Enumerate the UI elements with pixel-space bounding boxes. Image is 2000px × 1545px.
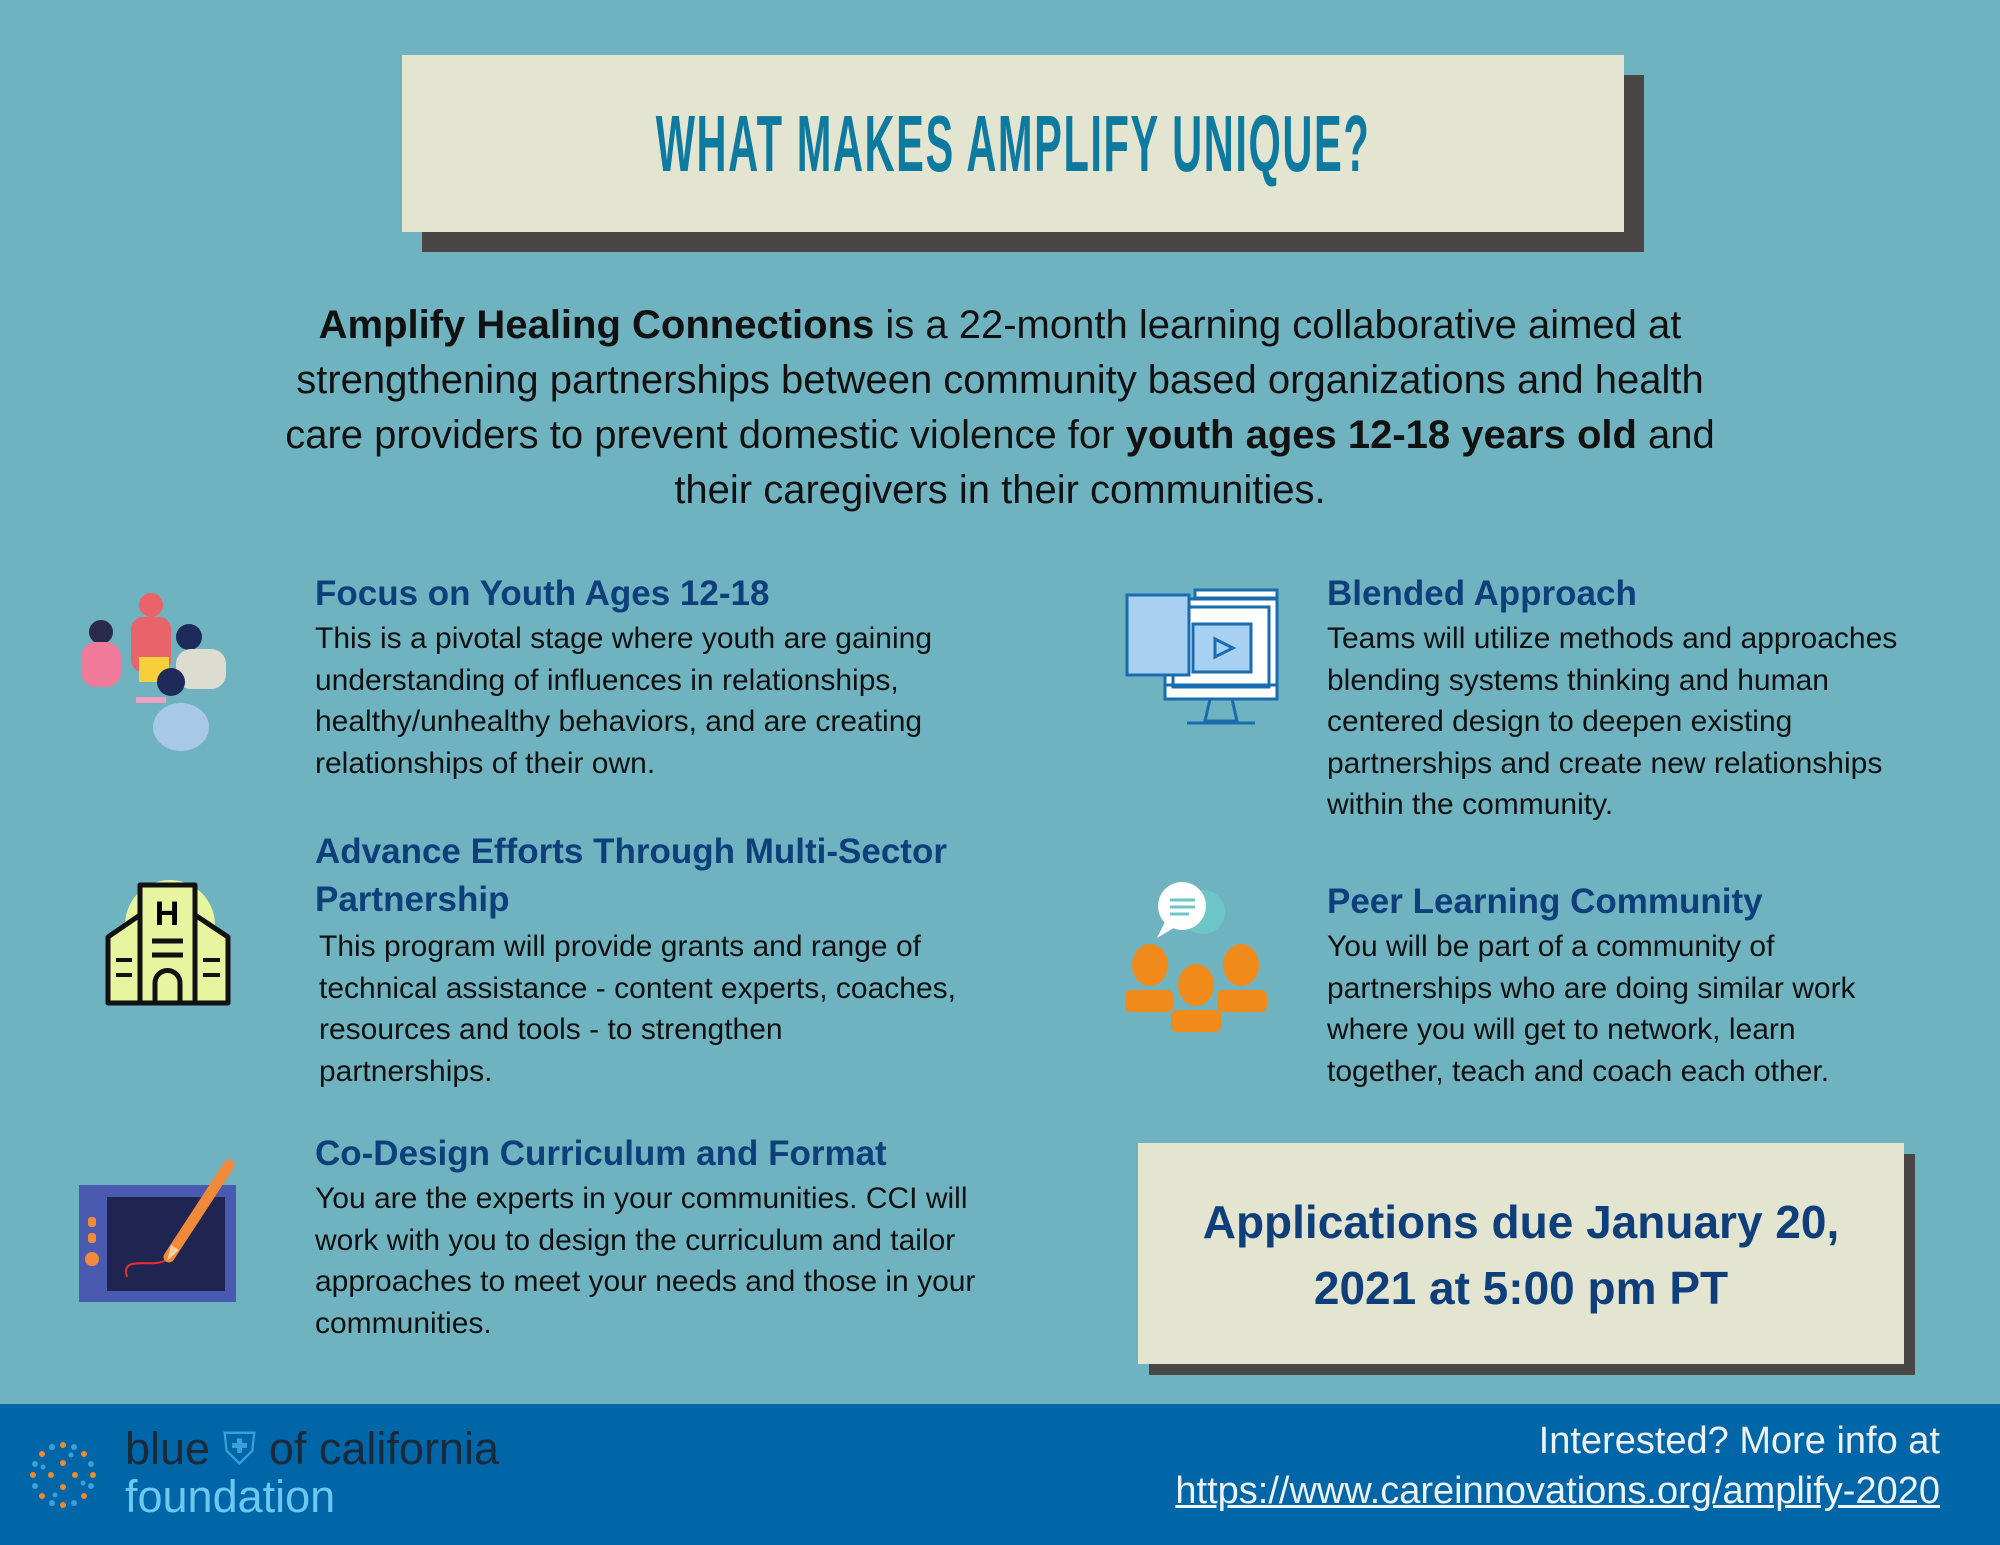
- section: focus on youth: understanding of influences in relationships,: [315, 664, 899, 697]
- section: peer learning: [1327, 882, 1856, 1088]
- section: focus on youth: This is a pivotal stage where youth are gaining: [315, 622, 932, 655]
- section: multi-sector: This program will provide grants and range of: [319, 930, 921, 963]
- section: blended approach: Teams will utilize methods and approaches: [1327, 622, 1897, 655]
- section: co-design: approaches to meet your needs and those in your: [315, 1265, 975, 1298]
- title: WHAT MAKES AMPLIFY UNIQUE?: [656, 99, 1370, 188]
- section: blended approach: within the community.: [1327, 788, 1613, 821]
- footer: [0, 1404, 2000, 1545]
- section: peer learning: together, teach and coach each other.: [1327, 1055, 1829, 1088]
- callout: applications due: Applications due January 20,: [1203, 1196, 1839, 1248]
- callout: applications due: 2021 at 5:00 pm PT: [1314, 1262, 1728, 1314]
- icon: tablet: [79, 1160, 236, 1302]
- footer link text: Interested? More info at: [1539, 1420, 1940, 1462]
- footer link text: https://www.careinnovations.org/amplify-2020: [1175, 1470, 1940, 1512]
- section: multi-sector: resources and tools - to strengthen: [319, 1013, 783, 1046]
- intro paragraph: Amplify Healing Connections is a 22-month learning collaborative aimed at: [319, 303, 1681, 347]
- section: focus on youth: [315, 574, 932, 780]
- icon: hospital: [106, 880, 230, 1006]
- section: co-design: You are the experts in your communities. CCI will: [315, 1182, 968, 1215]
- icon: logo starburst: [30, 1442, 96, 1508]
- icon: computer: [1126, 588, 1278, 724]
- section: peer learning: partnerships who are doing similar work: [1327, 972, 1856, 1005]
- callout: applications due: [1138, 1143, 1915, 1375]
- section: peer learning: where you will get to network, learn: [1327, 1013, 1796, 1046]
- section: focus on youth: healthy/unhealthy behaviors, and are creating: [315, 705, 922, 738]
- section: blended approach: partnerships and create new relationships: [1327, 747, 1882, 780]
- section: co-design: Co-Design Curriculum and Format: [315, 1134, 887, 1173]
- section: peer learning: Peer Learning Community: [1327, 882, 1763, 921]
- intro paragraph: care providers to prevent domestic violence for youth ages 12-18 years old and: [285, 413, 1715, 457]
- icon: peer group: [1125, 882, 1267, 1032]
- section: focus on youth: Focus on Youth Ages 12-18: [315, 574, 769, 613]
- section: blended approach: centered design to deepen existing: [1327, 705, 1792, 738]
- section: blended approach: blending systems thinking and human: [1327, 664, 1829, 697]
- section: multi-sector: Partnership: [315, 880, 510, 919]
- section: multi-sector: [315, 832, 956, 1088]
- intro paragraph: their caregivers in their communities.: [674, 468, 1326, 512]
- logo text: blue ⛨ of california: [125, 1423, 499, 1474]
- title box: [402, 55, 1644, 252]
- section: blended approach: [1327, 574, 1897, 821]
- section: multi-sector: technical assistance - content experts, coaches,: [319, 972, 956, 1005]
- icon: youth group: [81, 593, 226, 751]
- footer: foundation: [125, 1471, 335, 1522]
- section: peer learning: You will be part of a community of: [1327, 930, 1774, 963]
- section: multi-sector: Advance Efforts Through Multi-Sector: [315, 832, 947, 871]
- icon: hospital: H: [155, 895, 179, 933]
- footer link text: [1175, 1420, 1940, 1512]
- intro paragraph: [285, 303, 1715, 512]
- section: co-design: [315, 1134, 975, 1340]
- section: co-design: work with you to design the curriculum and tailor: [315, 1224, 955, 1257]
- section: co-design: communities.: [315, 1307, 492, 1340]
- section: blended approach: Blended Approach: [1327, 574, 1637, 613]
- section: multi-sector: partnerships.: [319, 1055, 492, 1088]
- intro paragraph: strengthening partnerships between community based organizations and health: [296, 358, 1704, 402]
- section: focus on youth: relationships of their own.: [315, 747, 655, 780]
